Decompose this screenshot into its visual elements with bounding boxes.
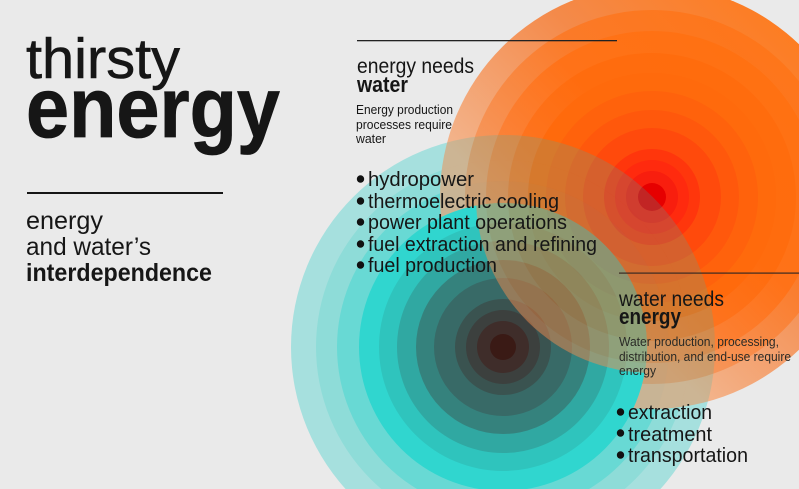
list: energy uses of water: fuel production xyxy=(368,254,497,277)
teal outer circles xyxy=(291,135,715,489)
subtitle xyxy=(26,207,212,287)
subtitle: interdependence xyxy=(26,259,212,287)
panel: energy needs water xyxy=(355,40,617,277)
orange concentric circles xyxy=(440,0,799,409)
list: water uses of energy: transportation xyxy=(628,444,748,467)
list: water uses of energy: extraction xyxy=(628,401,712,424)
heading: water needs energy: energy xyxy=(619,304,682,329)
panel: water needs energy xyxy=(617,272,799,467)
description: water production: Water production, processing, xyxy=(619,334,779,349)
teal core circles xyxy=(359,203,647,489)
list: water uses of energy: treatment xyxy=(628,423,712,446)
heading: water needs energy: water needs xyxy=(618,288,724,311)
list: water uses of energy xyxy=(617,401,748,467)
subtitle: energy xyxy=(26,207,103,235)
light teal rings tinting the orange xyxy=(440,135,715,409)
heading: water needs energy xyxy=(618,288,724,329)
heading: energy needs water: energy needs xyxy=(357,55,474,78)
list: energy uses of water xyxy=(357,168,597,277)
description: energy production: water xyxy=(355,131,387,146)
list: energy uses of water: thermoelectric cooling xyxy=(368,190,559,213)
title: energy xyxy=(26,61,280,156)
title xyxy=(26,27,280,156)
title: thirsty xyxy=(26,27,180,91)
description: water production: energy xyxy=(619,363,656,378)
description: energy production: processes require xyxy=(356,117,452,132)
list: energy uses of water: hydropower xyxy=(368,168,474,191)
list: energy uses of water: power plant operations xyxy=(368,211,567,234)
orange tint over teal core xyxy=(476,203,647,373)
list: energy uses of water: fuel extraction and refining xyxy=(368,233,597,256)
subtitle divider xyxy=(27,192,223,194)
subtitle: and water’s xyxy=(26,233,151,261)
heading: energy needs water xyxy=(356,55,474,97)
description: water production xyxy=(619,334,791,378)
heading: energy needs water: water xyxy=(356,72,408,97)
description: energy production xyxy=(355,102,453,146)
description: energy production: Energy production xyxy=(356,102,453,117)
